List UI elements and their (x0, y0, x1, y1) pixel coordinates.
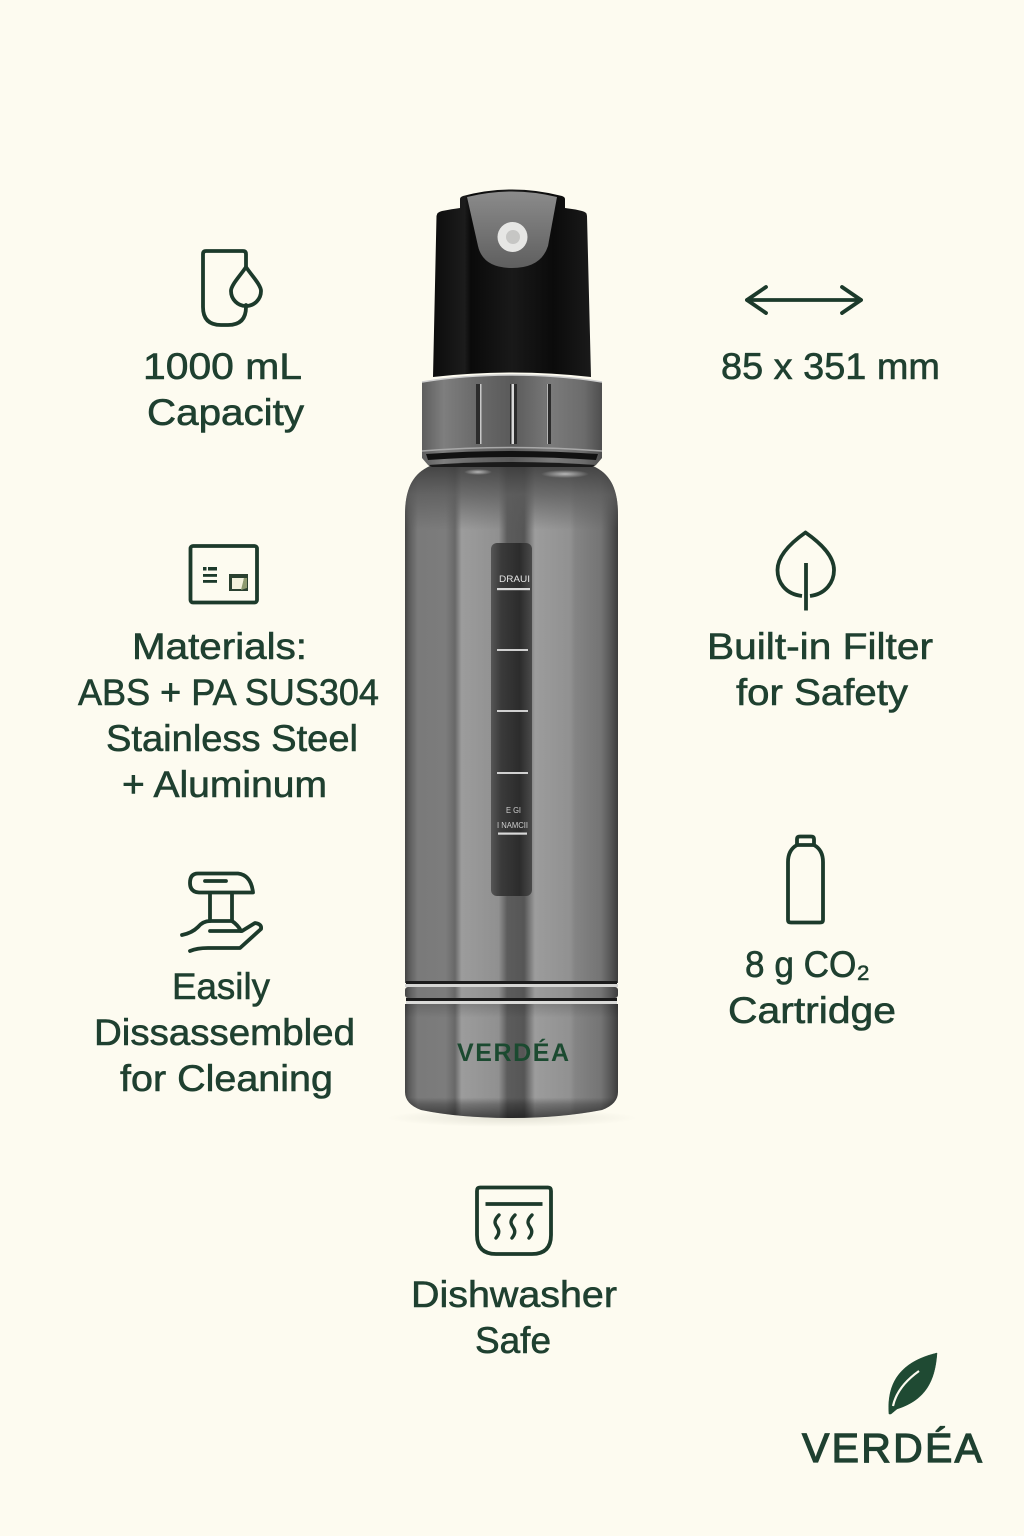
icon: double arrow (747, 287, 861, 313)
engraved brand name: VERDÉA (457, 1038, 569, 1067)
feature: cartridge (728, 836, 896, 1031)
measurement window: I NAMCII (497, 821, 528, 830)
measurement window: DRAUI (499, 574, 530, 585)
icon: material swatch box (190, 546, 257, 602)
icon: hand holding part (182, 874, 261, 951)
cartridge label: Cartridge (728, 990, 896, 1031)
product: stainless steel bottle (387, 190, 637, 1127)
cartridge label: 8 g CO₂ (745, 944, 870, 985)
feature: dishwasher (411, 1188, 617, 1361)
filter label: Built-in Filter (707, 626, 933, 667)
dishwasher label: Dishwasher (411, 1274, 617, 1315)
icon: leaf filter (778, 532, 834, 610)
nozzle button (467, 192, 557, 268)
disassembly label: Easily (172, 966, 270, 1007)
dimensions label: 85 x 351 mm (721, 346, 940, 387)
disassembly label: for Cleaning (120, 1058, 333, 1099)
filter label: for Safety (736, 672, 909, 713)
capacity label: Capacity (147, 392, 305, 433)
feature: disassembly (94, 874, 355, 1099)
spray cap (433, 190, 591, 377)
bottle base (405, 1004, 618, 1118)
collar (422, 375, 602, 467)
materials label: Stainless Steel (106, 718, 358, 759)
disassembly label: Dissassembled (94, 1012, 355, 1053)
feature: filter (707, 532, 933, 713)
measurement window: E GI (506, 806, 521, 815)
bottle rings (405, 981, 618, 1004)
measurement window (491, 543, 532, 896)
brand logo (802, 1353, 983, 1471)
materials label: ABS + PA SUS304 (78, 672, 379, 713)
dishwasher label: Safe (475, 1320, 551, 1361)
icon: cup with water drop (203, 251, 261, 325)
nozzle port (498, 222, 528, 252)
icon: CO2 cartridge (788, 836, 823, 922)
brand wordmark: VERDÉA (802, 1425, 983, 1471)
bottle ground shadow (387, 1109, 637, 1127)
materials label: Materials: (132, 626, 307, 667)
feature: capacity (143, 251, 305, 433)
feature: materials (78, 546, 379, 805)
capacity label: 1000 mL (143, 346, 302, 387)
leaf vein (893, 1371, 919, 1406)
icon: leaf (889, 1353, 937, 1414)
materials label: + Aluminum (122, 764, 327, 805)
icon: dishwasher with steam (477, 1188, 551, 1254)
feature: dimensions (721, 287, 940, 387)
bottle body (405, 466, 618, 983)
